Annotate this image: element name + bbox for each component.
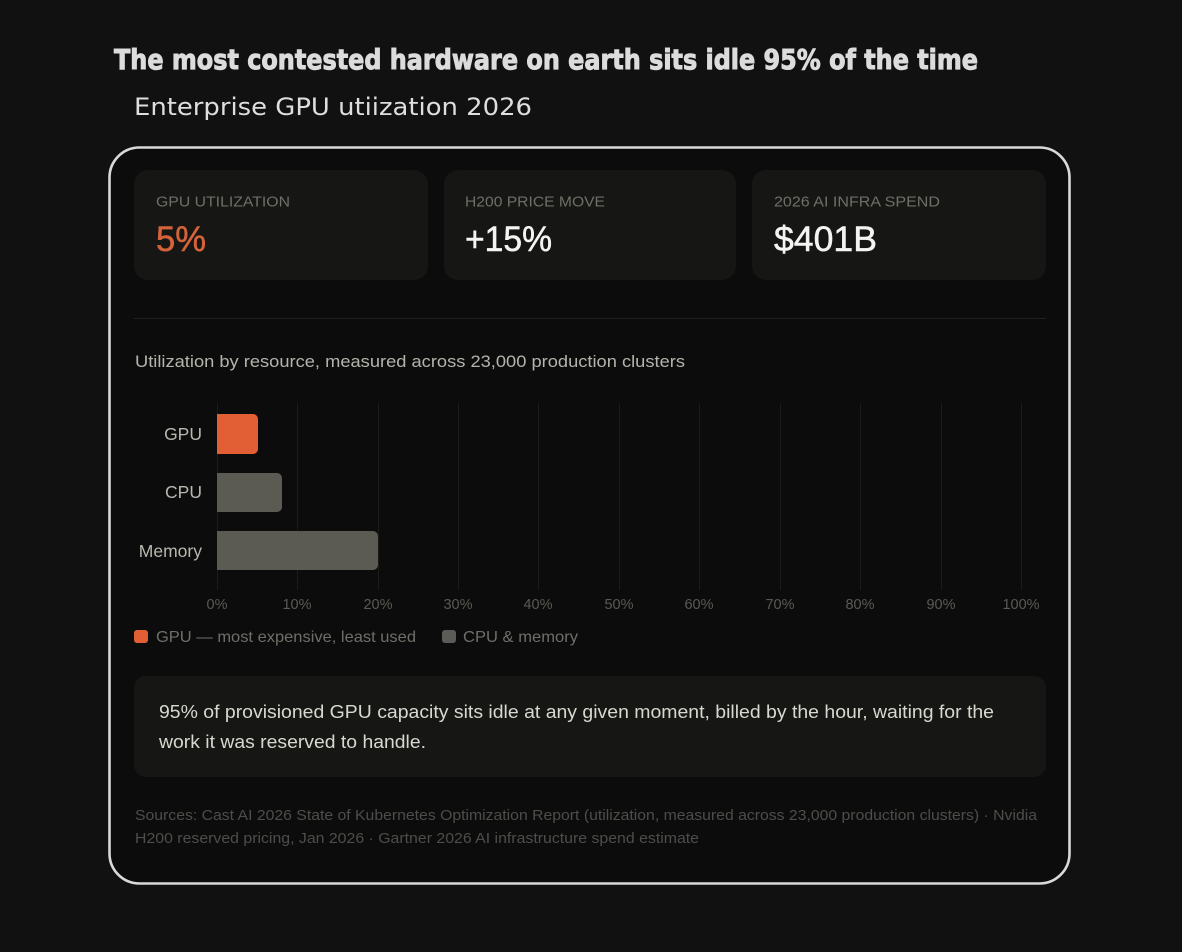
callout (134, 676, 1046, 777)
axis labels: 50% (604, 597, 634, 613)
panel: 2026 AI infra spend stat (752, 170, 1046, 280)
panel: main card (110, 148, 1070, 884)
stat label: GPU UTILIZATION (156, 194, 290, 210)
stat label: H200 PRICE MOVE (465, 194, 605, 210)
axis labels: 90% (926, 597, 956, 613)
legend label: GPU: GPU — most expensive, least used (156, 629, 416, 646)
category labels: Memory (139, 541, 202, 561)
title: The most contested hardware on earth sits idle 95% of the time (114, 43, 978, 76)
legend swatch: CPU and memory (442, 630, 456, 643)
stat value: 5% (156, 220, 206, 259)
axis labels: 10% (282, 597, 312, 613)
callout: 95% of provisioned GPU capacity sits idle at any given moment, billed by the hour, waiting for the (159, 701, 994, 722)
axis labels: 0% (207, 597, 228, 613)
stat value: +15% (465, 220, 552, 259)
category labels: CPU (165, 482, 202, 502)
axis labels: 70% (765, 597, 795, 613)
stat value: $401B (774, 220, 877, 259)
axis labels: 80% (845, 597, 875, 613)
subtitle: Enterprise GPU utiization 2026 (134, 93, 532, 121)
bar: Memory (217, 531, 378, 570)
legend label: CPU and memory: CPU & memory (463, 629, 578, 646)
panel: H200 price move stat (444, 170, 736, 280)
axis labels: 30% (443, 597, 473, 613)
legend (134, 629, 578, 646)
axis labels (207, 597, 1040, 613)
bar: CPU (217, 473, 282, 512)
callout: work it was reserved to handle. (158, 731, 426, 752)
chart heading: Utilization by resource, measured across 23,000 production clusters (135, 352, 685, 371)
category labels: GPU (164, 424, 202, 444)
axis labels: 100% (1002, 597, 1040, 613)
axis labels: 60% (684, 597, 714, 613)
legend swatch: GPU (134, 630, 148, 643)
stat label: 2026 AI INFRA SPEND (774, 194, 940, 210)
panel: GPU utilization stat (134, 170, 428, 280)
bar chart (139, 403, 1040, 613)
sources (135, 807, 1038, 847)
bar: GPU (217, 414, 258, 454)
axis labels: 40% (523, 597, 553, 613)
sources: Sources: Cast AI 2026 State of Kubernetes Optimization Report (utilization, measured across 23,000 production clusters) · Nvidia (135, 807, 1038, 824)
category labels (139, 424, 202, 561)
sources: H200 reserved pricing, Jan 2026 · Gartner 2026 AI infrastructure spend estimate (135, 830, 699, 847)
axis labels: 20% (363, 597, 393, 613)
